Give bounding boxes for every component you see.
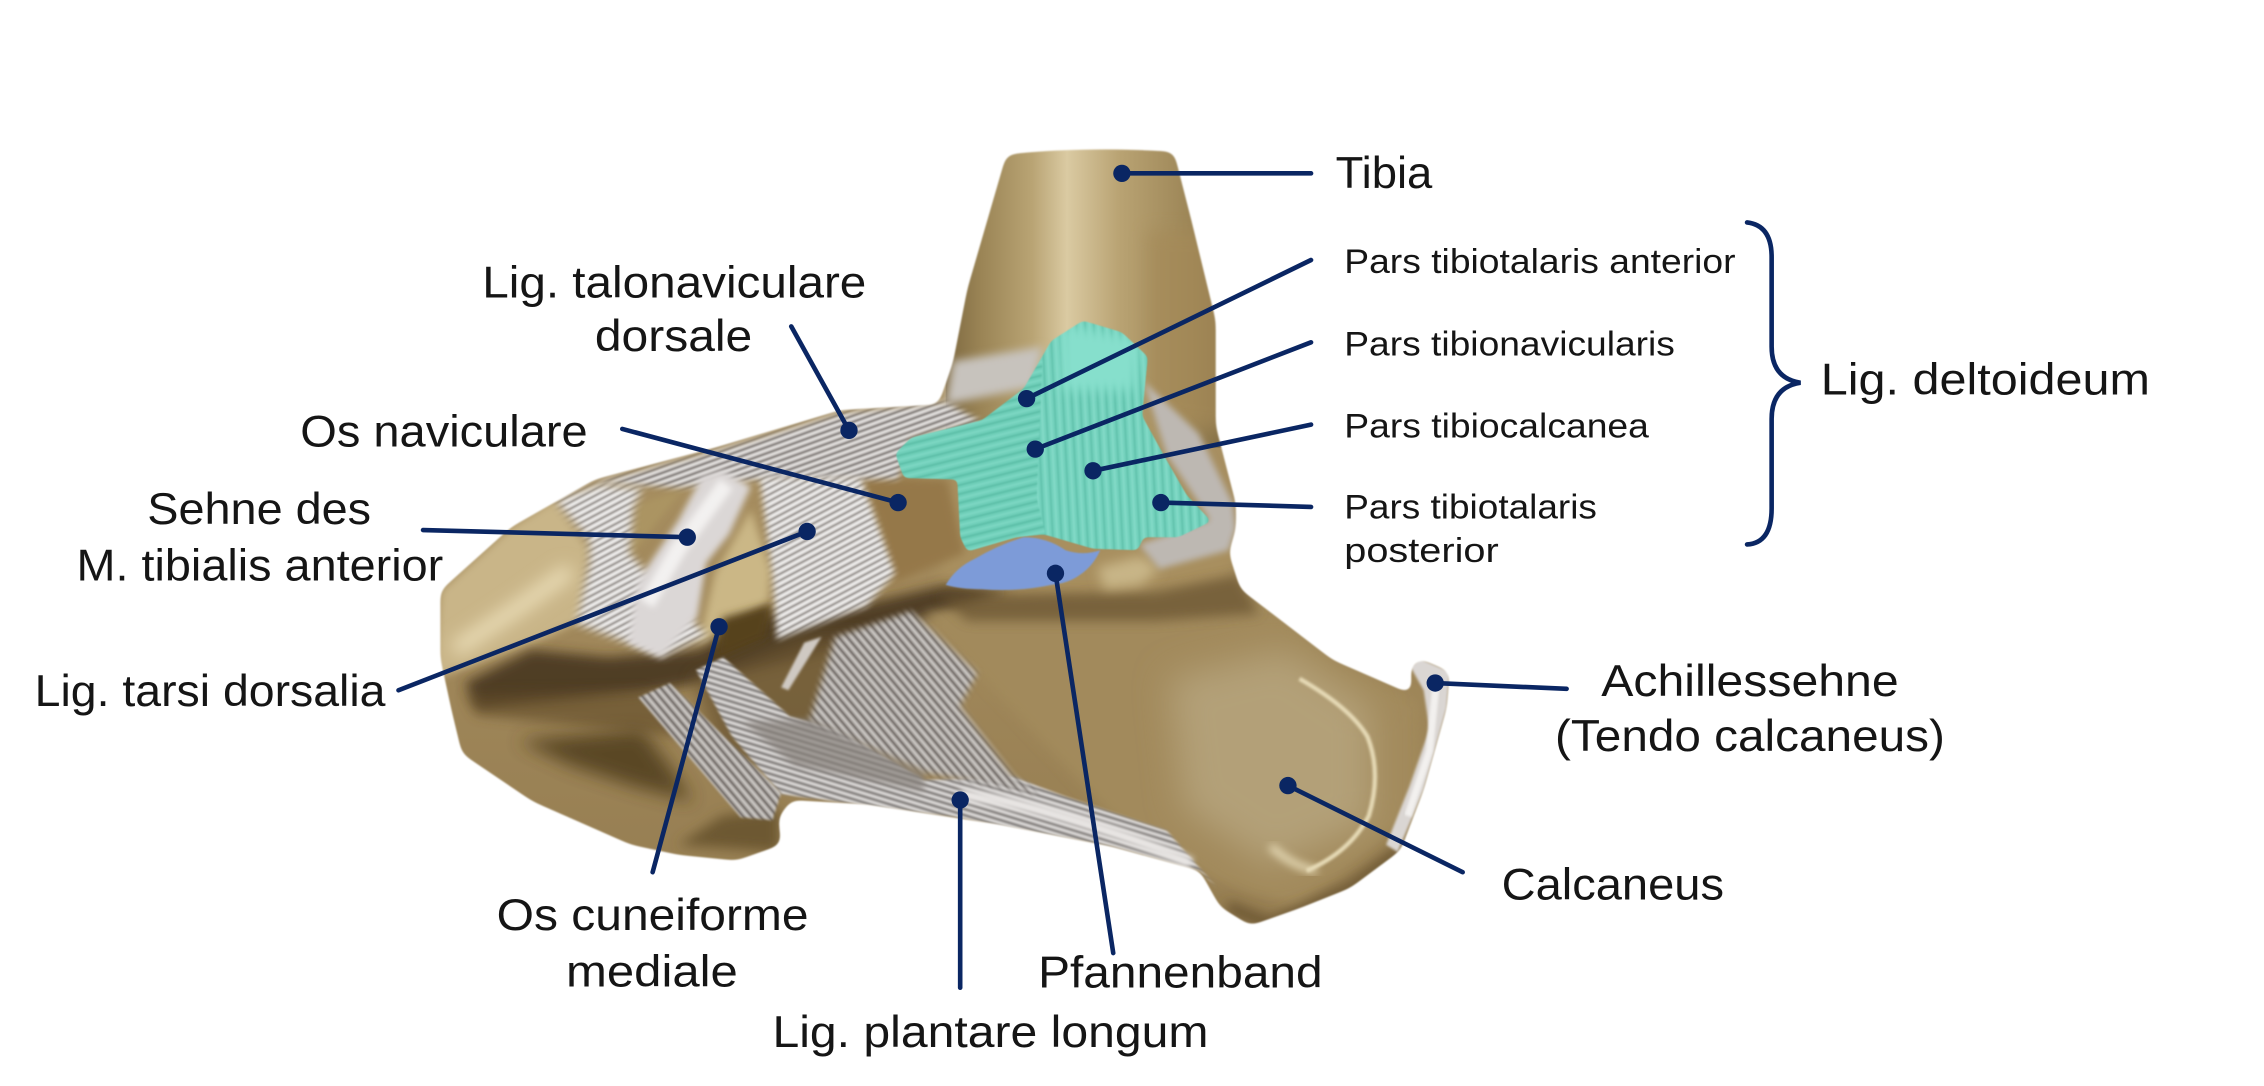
line: Sehne des M. tibialis anterior	[423, 529, 696, 546]
brace: Lig. deltoideum	[1747, 222, 1801, 544]
line: Achillessehne	[1427, 674, 1567, 692]
label: Calcaneus: Calcaneus	[1502, 860, 1724, 910]
line: Pfannenband	[1047, 565, 1113, 953]
calcaneus body	[924, 606, 1410, 903]
label: Lig. tarsi dorsalia: Lig. tarsi dorsalia	[35, 666, 386, 716]
bone base	[440, 381, 1450, 924]
label: Lig. talonaviculare dorsale	[482, 258, 866, 361]
plantar shadows	[465, 585, 1011, 708]
label: Lig. deltoideum: Lig. deltoideum	[1821, 354, 2150, 404]
line: Pars tibiocalcanea	[1084, 425, 1311, 479]
label: Os cuneiforme mediale	[497, 890, 809, 996]
line: Lig. talonaviculare dorsale	[791, 326, 858, 439]
callout lines and dots	[399, 165, 1801, 988]
label: Achillessehne (Tendo calcaneus): Achillessehne	[1601, 656, 1899, 706]
label: Sehne des M. tibialis anterior	[77, 484, 443, 591]
tibia shaft	[946, 137, 1235, 448]
label: Pars tibiotalaris anterior: Pars tibiotalaris anterior	[1344, 243, 1736, 281]
line: Pars tibiotalaris posterior	[1152, 494, 1311, 511]
line: Pars tibiotalaris anterior	[1018, 260, 1311, 407]
plantar bright band	[960, 794, 1191, 864]
tibia lower shading	[1194, 244, 1216, 431]
dorsal talonavicular ligament	[596, 398, 981, 492]
label: Pars tibiocalcanea: Pars tibiocalcanea	[1344, 408, 1650, 446]
long plantar ligament fan	[806, 607, 1038, 796]
label: Pfannenband: Pfannenband	[1038, 948, 1323, 998]
plantar shaded core	[744, 719, 924, 791]
label: Pars tibionavicularis: Pars tibionavicularis	[1344, 325, 1675, 363]
plantar ligaments	[694, 656, 1214, 884]
dorsal tarsal ligaments	[756, 472, 899, 644]
line: Pars tibionavicularis	[1027, 342, 1311, 458]
line: Lig. tarsi dorsalia	[399, 523, 816, 690]
medial band	[638, 682, 782, 822]
line: Os naviculare	[622, 429, 907, 511]
region: Pfannenband highlighted in blue	[946, 537, 1100, 590]
forefoot ligaments	[554, 479, 710, 662]
label: Sehne des M. tibialis anterior: M. tibialis anterior	[77, 541, 443, 591]
talus body	[939, 433, 1242, 595]
line: Lig. plantare longum	[952, 791, 969, 988]
achilles tendon	[1386, 659, 1450, 852]
label: Pars tibiotalaris posterior	[1344, 488, 1597, 570]
label: Achillessehne (Tendo calcaneus): (Tendo calcaneus)	[1555, 711, 1945, 761]
label: Pars tibiotalaris posterior: Pars tibiotalaris	[1344, 488, 1597, 526]
label: Tibia: Tibia	[1336, 148, 1432, 198]
label: Lig. talonaviculare dorsale: Lig. talonaviculare	[482, 258, 866, 308]
talus lower highlight	[1097, 556, 1159, 589]
first metatarsal highlight	[433, 500, 589, 679]
label: Sehne des M. tibialis anterior: Sehne des	[147, 484, 371, 534]
line: Os cuneiforme mediale	[653, 618, 728, 872]
line: Calcaneus	[1279, 777, 1463, 872]
label: Os cuneiforme mediale: mediale	[566, 946, 738, 996]
region: Lig. deltoideum highlighted in teal	[896, 320, 1210, 551]
label: Lig. talonaviculare dorsale: dorsale	[595, 311, 752, 361]
ankle capsule right	[1139, 381, 1236, 569]
small white slip	[781, 637, 822, 690]
tibialis anterior tendon	[628, 471, 751, 657]
label: Os naviculare: Os naviculare	[300, 406, 588, 456]
cuneiform bone	[697, 510, 771, 647]
ankle capsule left	[946, 347, 1042, 404]
label: Lig. plantare longum: Lig. plantare longum	[772, 1007, 1209, 1057]
label: Pars tibiotalaris posterior: posterior	[1344, 532, 1499, 570]
line: Tibia	[1113, 165, 1311, 182]
label: Os cuneiforme mediale: Os cuneiforme	[497, 890, 809, 940]
label: Achillessehne (Tendo calcaneus)	[1555, 656, 1945, 761]
navicular bone	[862, 477, 965, 583]
illustration: medial view of the foot and ankle	[426, 137, 1466, 946]
